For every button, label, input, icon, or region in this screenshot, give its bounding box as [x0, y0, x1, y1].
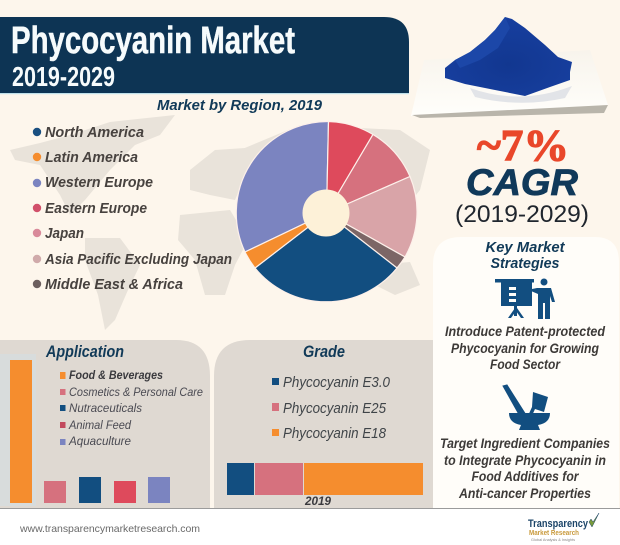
bar chart: application [10, 360, 170, 503]
legend: grade: Phycocyanin E18 [283, 425, 387, 442]
panel: application [0, 340, 210, 508]
legend: grade [272, 374, 391, 442]
slice: Asia Pacific Excluding Japan [326, 176, 417, 257]
legend: application: Aquaculture [68, 434, 131, 448]
legend: grade: Phycocyanin E25 [283, 400, 387, 417]
legend item: North America: North America [45, 124, 144, 141]
stat: CAGR [455, 121, 589, 228]
logo: Transparency Market Research: Market Research [529, 528, 579, 537]
legend item: Latin America: Latin America [45, 149, 138, 166]
legend item: Asia Pacific Excluding Japan: Asia Pacific Excluding Japan [44, 251, 232, 268]
title: Phycocyanin Market [11, 20, 295, 62]
legend: application: Food & Beverages [69, 368, 163, 382]
slice: North America [255, 213, 397, 302]
text: strategy 2 [440, 435, 610, 501]
text: strategy 1 [445, 323, 605, 372]
text: strategy 1: Introduce Patent-protected [445, 323, 605, 339]
heading: market by region: Market by Region, 2019 [157, 97, 323, 114]
world map background [10, 115, 430, 330]
header banner [0, 17, 409, 94]
heading: key market strategies: Key Market [486, 239, 565, 256]
subtitle years: 2019-2029 [12, 61, 115, 92]
stat period: (2019-2029) [455, 201, 589, 228]
text: strategy 2: Food Additives for [472, 468, 580, 484]
legend: regions [33, 124, 232, 293]
slice: Latin America [245, 213, 326, 268]
text: strategy 2: Anti-cancer Properties [458, 485, 591, 501]
logo: Transparency Market Research: Transparency [528, 518, 589, 530]
slice: Western Europe [236, 121, 328, 252]
stacked bar: grade 2019 [227, 463, 423, 495]
legend: application: Cosmetics & Personal Care [69, 385, 203, 399]
legend item: Eastern Europe: Eastern Europe [45, 200, 147, 217]
icon: mortar and pestle [503, 385, 550, 430]
slice: Middle East and Africa [326, 213, 405, 268]
stat value: ~7% [477, 121, 569, 170]
legend item: Middle East & Africa: Middle East & Africa [45, 276, 183, 293]
donut hole [302, 190, 350, 236]
logo: Transparency Market Research [528, 513, 599, 542]
logo: Transparency Market Research: Global Analysis & Insights [531, 537, 575, 542]
legend: application: Animal Feed [68, 418, 131, 432]
panel: key market strategies [433, 237, 619, 508]
text: strategy 1: Food Sector [490, 356, 561, 372]
panel: grade [214, 340, 433, 508]
legend: grade: Phycocyanin E3.0 [283, 374, 391, 391]
slice: Eastern Europe [326, 122, 373, 213]
legend item: Japan: Japan [45, 225, 84, 242]
icon: presenter at board [495, 278, 555, 319]
heading: key market strategies [486, 239, 565, 272]
slice: Japan [326, 134, 410, 213]
website url: www.transparencymarketresearch.com [19, 523, 200, 535]
donut chart: market by region [236, 121, 417, 302]
image: blue powder on white plate [411, 17, 608, 118]
axis label: 2019: 2019 [304, 494, 331, 508]
legend item: Western Europe: Western Europe [45, 174, 153, 191]
heading: application: Application [45, 342, 124, 361]
heading: grade: Grade [303, 342, 345, 361]
stat label: CAGR [466, 162, 578, 203]
heading: key market strategies: Strategies [490, 255, 560, 272]
text: strategy 1: Phycocyanin for Growing [451, 340, 599, 356]
legend: application: Nutraceuticals [69, 401, 142, 415]
legend: application [60, 368, 203, 448]
